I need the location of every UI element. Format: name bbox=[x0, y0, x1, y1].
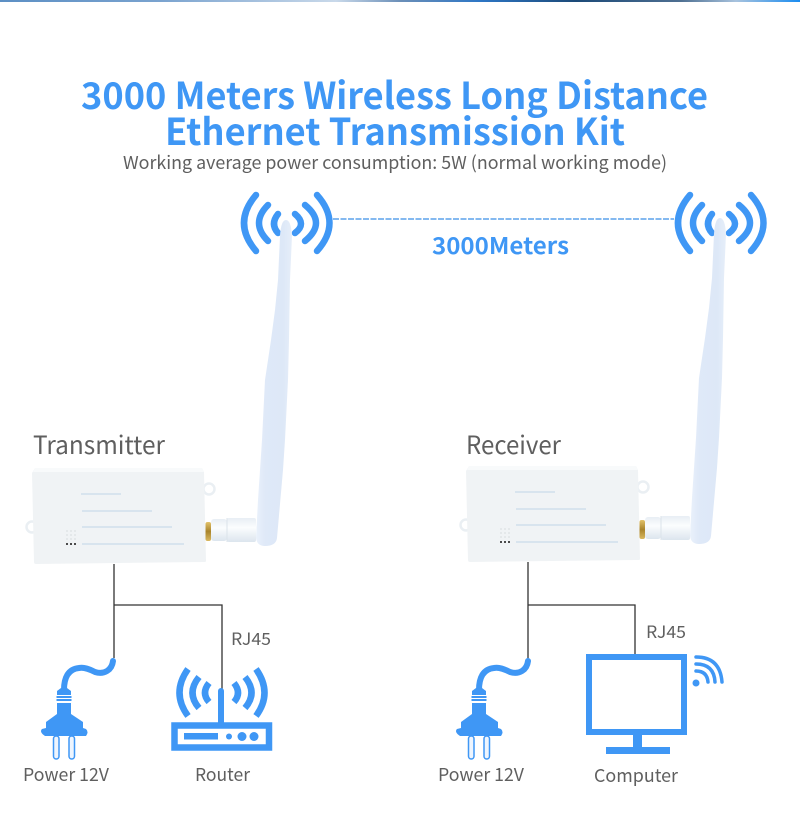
device: transmitter box bbox=[26, 468, 256, 564]
label: Computer: Computer bbox=[594, 762, 679, 788]
top edge strip bbox=[0, 0, 800, 2]
label: RJ45 (receiver): RJ45 bbox=[646, 618, 686, 643]
label: Power 12V (transmitter): Power 12V bbox=[23, 761, 110, 787]
wiring: receiver bbox=[528, 562, 635, 660]
subtitle: Working average power consumption: 5W (normal working mode) bbox=[123, 149, 667, 175]
title: Ethernet Transmission Kit bbox=[165, 102, 625, 156]
signal waves: receiver bbox=[678, 195, 764, 251]
wiring: transmitter bbox=[114, 564, 222, 690]
icon: router bbox=[174, 669, 269, 748]
device: receiver box bbox=[460, 466, 690, 562]
title: 3000 Meters Wireless Long Distance bbox=[81, 66, 708, 120]
antenna: receiver bbox=[690, 218, 726, 544]
distance label: 3000Meters bbox=[432, 227, 569, 261]
label: RJ45 (transmitter): RJ45 bbox=[231, 625, 271, 650]
icon: power plug (receiver) bbox=[456, 661, 528, 759]
antenna: transmitter bbox=[256, 220, 292, 546]
label: Power 12V (receiver): Power 12V bbox=[438, 761, 525, 787]
title bbox=[81, 66, 708, 156]
icon: computer monitor with wifi bbox=[589, 657, 722, 754]
label: Receiver: Receiver bbox=[466, 426, 561, 462]
label: Transmitter: Transmitter bbox=[33, 426, 165, 462]
label: Router: Router bbox=[195, 761, 251, 787]
signal waves: transmitter bbox=[244, 195, 330, 251]
distance link: dashed line bbox=[333, 218, 674, 220]
icon: power plug (transmitter) bbox=[41, 661, 113, 759]
